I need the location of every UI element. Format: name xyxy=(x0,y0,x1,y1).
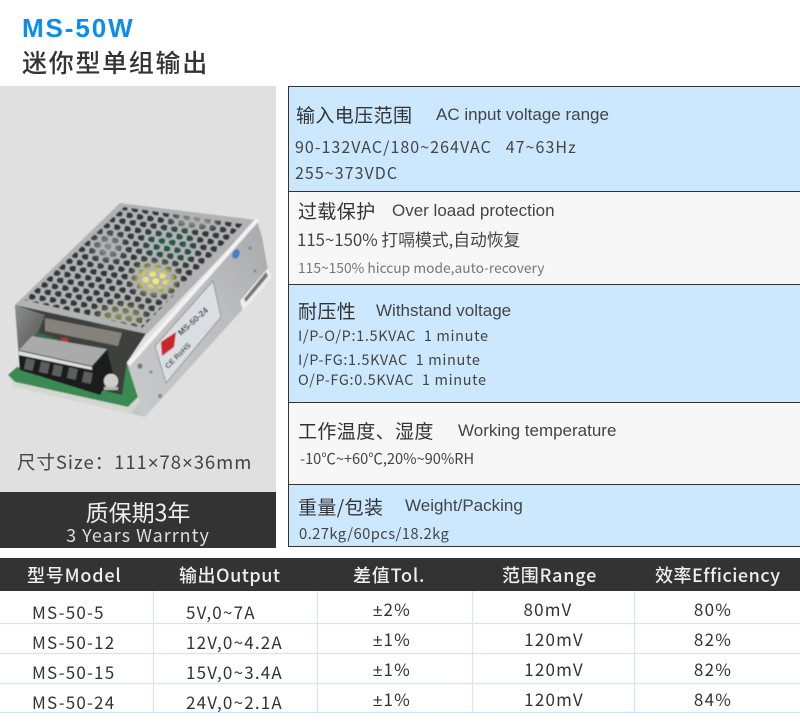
row: MS-50-24: MS-50-24 xyxy=(32,689,115,714)
heading English: Over loaad protection xyxy=(392,201,555,220)
title: model name: MS-50W xyxy=(22,13,135,43)
left wall xyxy=(15,305,45,352)
values: 90-132VAC/180~264VAC 47~63Hz xyxy=(295,134,577,158)
row: MS-50-24 xyxy=(32,686,732,714)
subtitle: mini single-output: 迷你型单组输出 xyxy=(22,44,209,80)
panel: weight and packing xyxy=(288,484,800,547)
row: MS-50-15: 82% xyxy=(694,656,732,681)
heading: 工作温度、湿度 xyxy=(298,417,434,444)
panel: overload protection xyxy=(288,191,800,285)
view through cover xyxy=(22,206,245,330)
column head: range: 范围Range xyxy=(502,562,597,588)
column head: output: 输出Output xyxy=(179,562,280,588)
values: 0.27kg/60pcs/18.2kg xyxy=(299,523,449,544)
red component xyxy=(61,338,68,342)
panel: product image xyxy=(0,86,276,548)
row: MS-50-5: ±2% xyxy=(373,596,411,621)
row: MS-50-24: 120mV xyxy=(524,686,584,711)
size text: 尺寸Size：111×78×36mm xyxy=(17,449,252,475)
row: MS-50-5: MS-50-5 xyxy=(32,599,105,624)
heading English: Weight/Packing xyxy=(405,496,523,515)
panel: withstand voltage xyxy=(288,284,800,403)
column head: model: 型号Model xyxy=(27,562,122,588)
label xyxy=(155,281,221,383)
interior xyxy=(15,305,147,395)
values: 115~150% 打嗝模式,自动恢复 xyxy=(297,227,520,251)
white sticker xyxy=(240,268,272,311)
line 2: I/P-FG:1.5KVAC 1 minute xyxy=(298,349,481,370)
icon: power supply product xyxy=(8,202,271,417)
terminal block body xyxy=(19,350,113,395)
heading: 输入电压范围 xyxy=(296,101,412,128)
heading English: Working temperature xyxy=(458,421,616,440)
table header xyxy=(0,558,800,591)
table: model specifications xyxy=(0,558,800,713)
heading: 耐压性 xyxy=(298,297,356,324)
terminal block top xyxy=(19,336,107,366)
column head: efficiency: 效率Efficiency xyxy=(655,562,781,588)
row: MS-50-12: 12V,0~4.2A xyxy=(186,629,283,654)
row: MS-50-24: 84% xyxy=(694,686,732,711)
grid lines xyxy=(0,591,800,713)
column head: tolerance: 差值Tol. xyxy=(353,562,425,588)
line 3: O/P-FG:0.5KVAC 1 minute xyxy=(298,369,487,390)
heading English: Withstand voltage xyxy=(376,301,511,320)
row: MS-50-5: 80% xyxy=(694,596,732,621)
row: MS-50-24: ±1% xyxy=(373,686,411,711)
icon: power supply product: CE RoHS xyxy=(163,341,193,370)
values English: 115~150% hiccup mode,auto-recovery xyxy=(298,257,544,277)
row: MS-50-12: ±1% xyxy=(373,626,411,651)
row: MS-50-15: ±1% xyxy=(373,656,411,681)
row: MS-50-15: 15V,0~3.4A xyxy=(186,659,283,684)
row: MS-50-12 xyxy=(32,626,732,654)
icon: power supply product: MS-50-24 xyxy=(176,305,210,337)
capacitor knob xyxy=(104,374,118,388)
heading: 重量/包装 xyxy=(298,493,383,520)
row: MS-50-15 xyxy=(32,656,732,684)
panel: working temperature xyxy=(288,402,800,485)
row: MS-50-15: 120mV xyxy=(524,656,584,681)
base plate xyxy=(12,372,145,417)
blue screw xyxy=(231,248,241,260)
row: MS-50-5: 80mV xyxy=(524,596,572,621)
capacitor xyxy=(45,318,122,346)
side flange xyxy=(127,218,272,417)
row: MS-50-12: MS-50-12 xyxy=(32,629,115,654)
warranty band xyxy=(0,492,276,548)
row: MS-50-5 xyxy=(32,596,732,624)
line 1: I/P-O/P:1.5KVAC 1 minute xyxy=(298,325,489,346)
row: MS-50-5: 5V,0~7A xyxy=(186,599,256,624)
heading English: AC input voltage range xyxy=(436,105,609,124)
heading: 过载保护 xyxy=(298,197,376,224)
row: MS-50-12: 120mV xyxy=(524,626,584,651)
pcb xyxy=(8,363,138,407)
row: MS-50-15: MS-50-15 xyxy=(32,659,115,684)
panel: AC input voltage xyxy=(288,86,800,192)
warranty English: 3 Years Warrnty xyxy=(66,522,210,548)
warranty heading: 质保期3年 xyxy=(86,494,190,528)
row: MS-50-24: 24V,0~2.1A xyxy=(186,689,283,714)
row: MS-50-12: 82% xyxy=(694,626,732,651)
values DC: 255~373VDC xyxy=(295,160,398,184)
perforated cover plate xyxy=(15,203,256,334)
values: -10℃~+60℃,20%~90%RH xyxy=(300,448,474,469)
